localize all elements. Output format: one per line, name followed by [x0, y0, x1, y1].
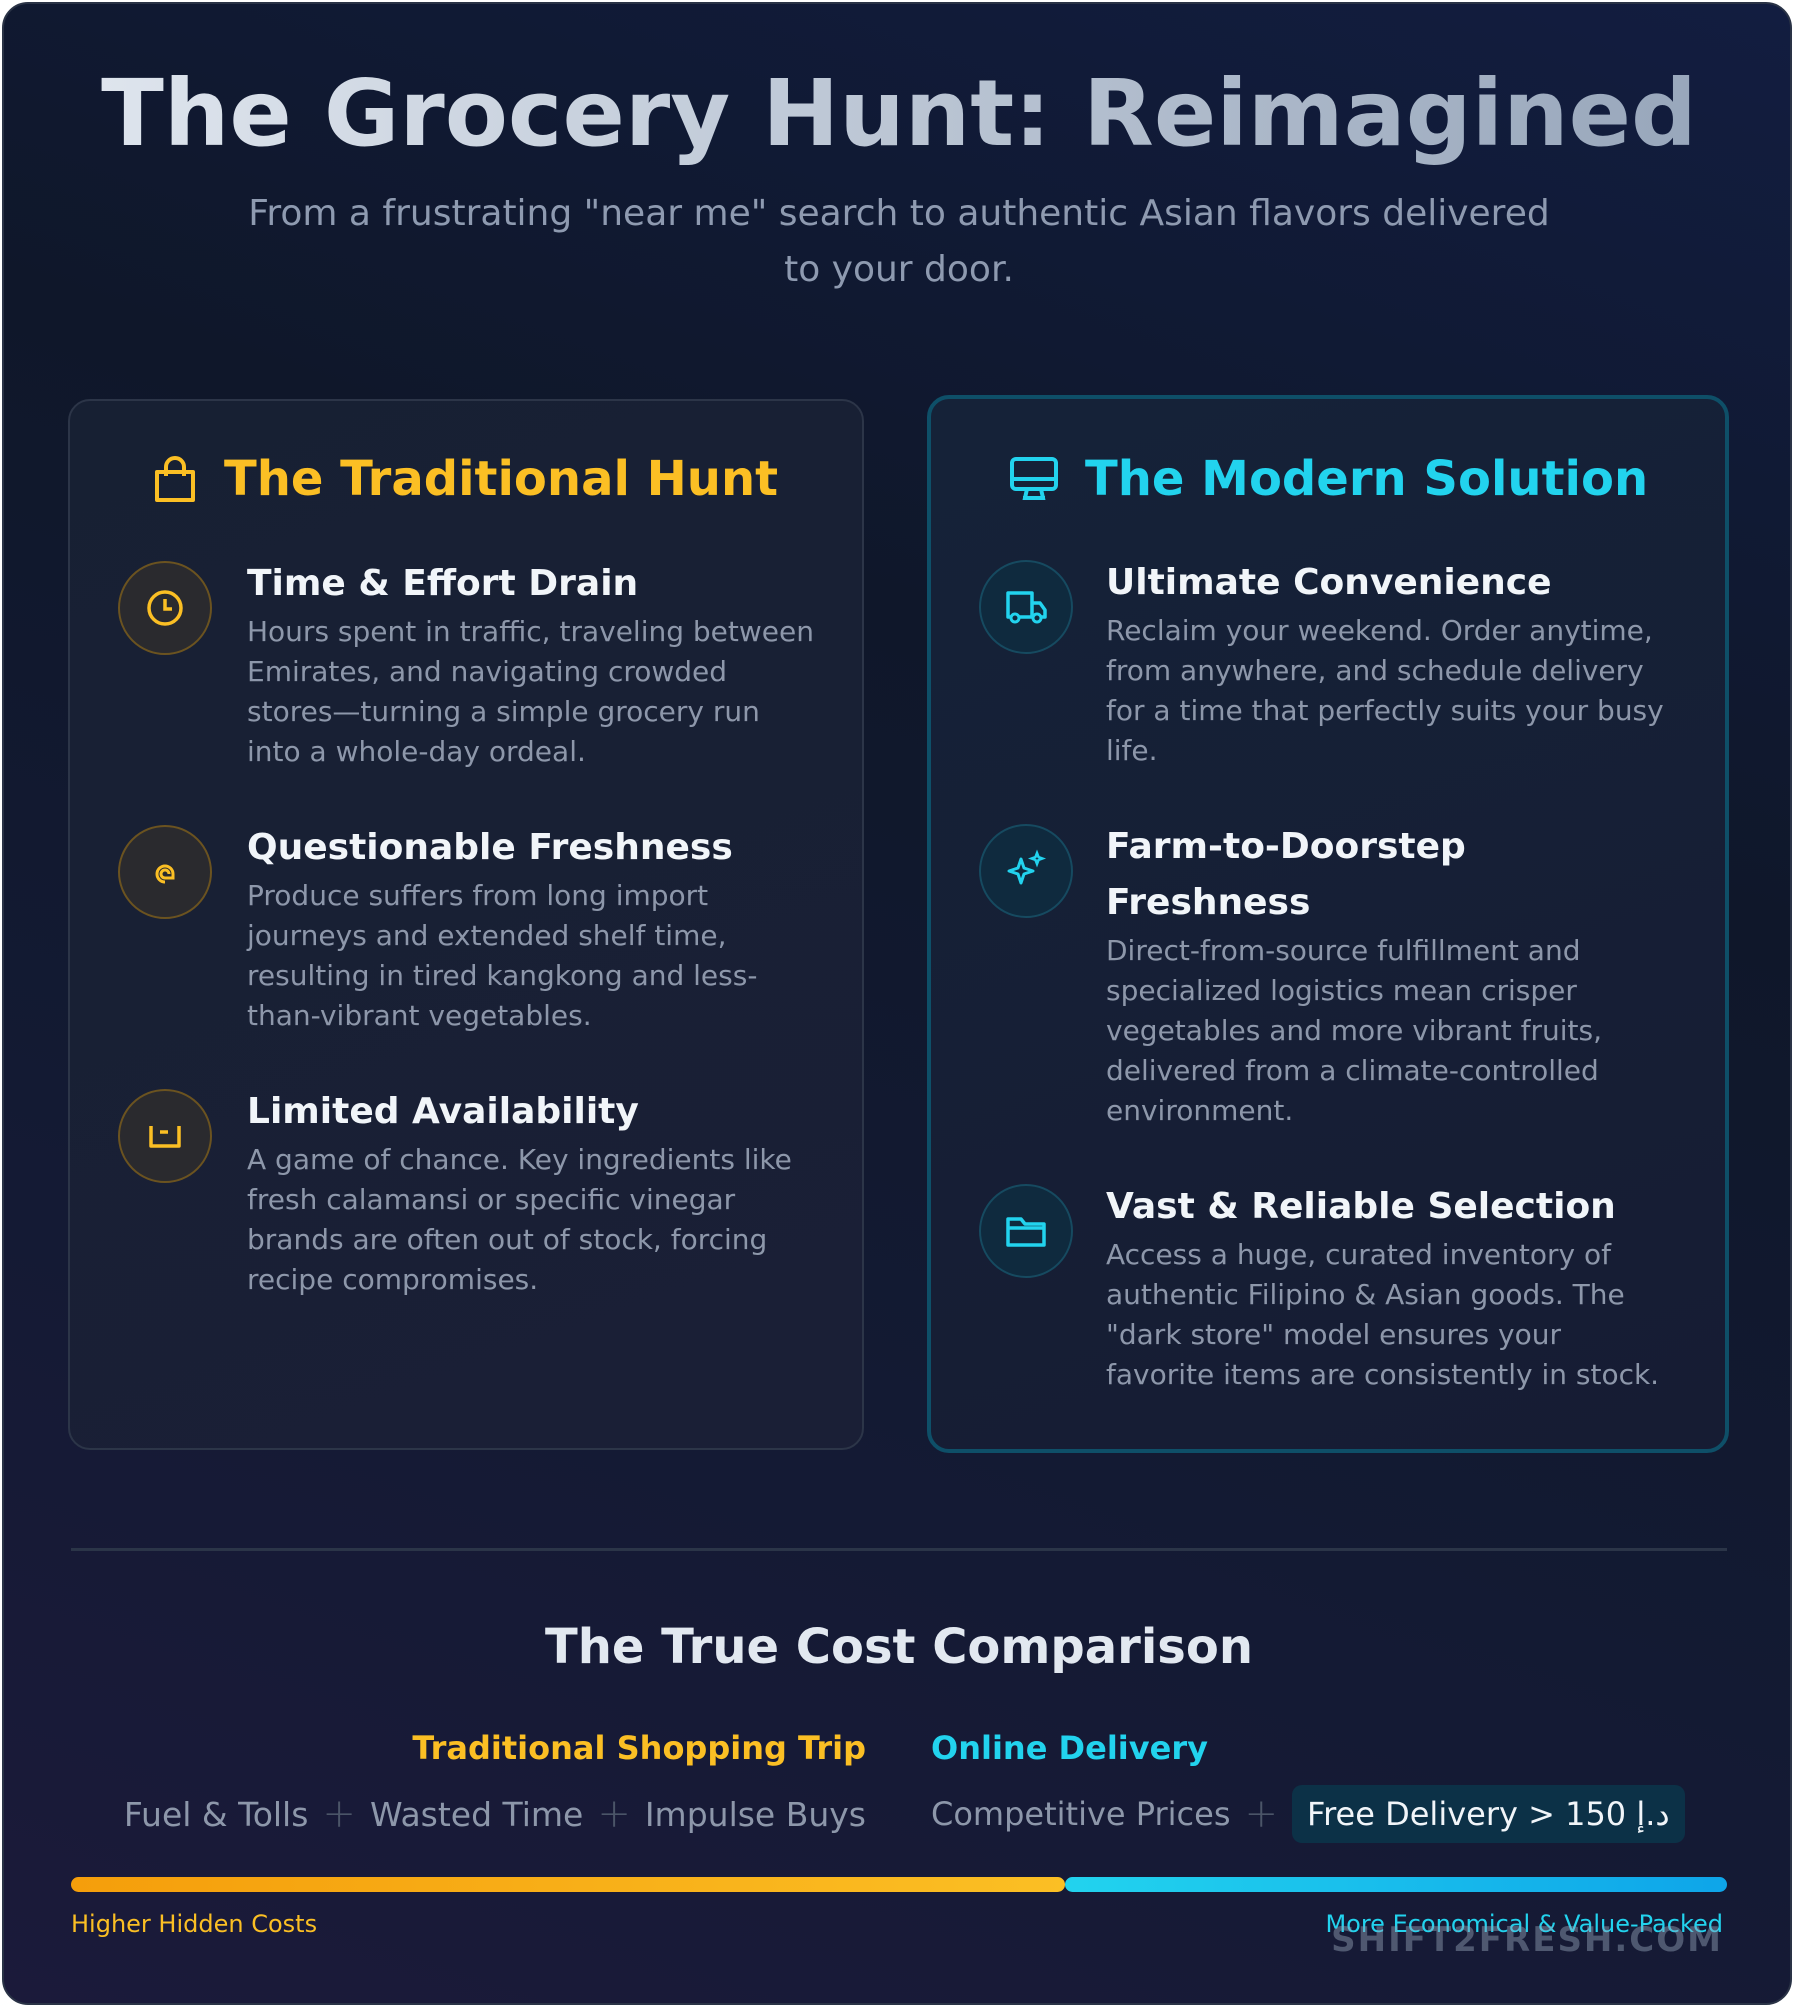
- badge: free delivery: Free Delivery > 150 د.إ: [1307, 1795, 1670, 1833]
- icon: truck: [979, 560, 1073, 654]
- item: convenience: Reclaim your weekend. Order anytime, from anywhere, and schedule delivery for a time that perfectly suits your busy life.: [1106, 614, 1664, 767]
- bar: cost gradient: [71, 1877, 1727, 1892]
- cost comparison: online: [931, 1729, 1685, 1843]
- label: higher costs: Higher Hidden Costs: [71, 1910, 317, 1938]
- panel: modern solution: [927, 395, 1729, 1453]
- cost comparison: online: Competitive Prices: [931, 1795, 1230, 1833]
- item: availability: Limited Availability: [247, 1091, 639, 1132]
- icon: swirl: [118, 825, 212, 919]
- heading: true cost comparison: The True Cost Comparison: [545, 1619, 1253, 1675]
- icon: clock: [118, 561, 212, 655]
- icon: sparkles: [979, 824, 1073, 918]
- icon: folder: [979, 1184, 1073, 1278]
- item: freshness: Questionable Freshness: [247, 827, 733, 868]
- item: farm freshness: [979, 824, 1602, 1127]
- cost comparison: traditional: [124, 1729, 866, 1837]
- cost comparison: online: Online Delivery: [931, 1729, 1208, 1767]
- item: time & effort: [118, 561, 814, 768]
- item: convenience: Ultimate Convenience: [1106, 562, 1552, 603]
- item: convenience: [979, 560, 1664, 767]
- title: The Grocery Hunt: Reimagined: [101, 60, 1697, 167]
- item: time & effort: Hours spent in traffic, traveling between Emirates, and navigating crowded stores—turning a simple grocery run into a whole-day ordeal.: [247, 615, 814, 768]
- item: farm freshness: Farm-to-Doorstep Freshness: [1106, 826, 1466, 923]
- item: availability: A game of chance. Key ingredients like fresh calamansi or specific vinegar brands are often out of stock, forcing recipe compromises.: [247, 1143, 792, 1296]
- cost comparison: traditional: +: [597, 1791, 631, 1837]
- cost comparison: traditional: Fuel & Tolls Wasted Time Impulse Buys: [124, 1794, 866, 1834]
- icon: basket: [118, 1089, 212, 1183]
- label: economical: More Economical & Value-Packed: [1325, 1910, 1723, 1938]
- item: selection: Vast & Reliable Selection: [1106, 1186, 1616, 1227]
- item: freshness: [118, 825, 757, 1032]
- heading: traditional hunt: The Traditional Hunt: [224, 451, 778, 507]
- heading: modern solution: The Modern Solution: [1085, 451, 1648, 507]
- item: availability: [118, 1089, 792, 1296]
- item: farm freshness: Direct-from-source fulfillment and specialized logistics mean crisper vegetables and more vibrant fruits, delivered from a climate-controlled environment.: [1106, 934, 1602, 1127]
- watermark: SHIFT2FRESH.COM: [1331, 1920, 1723, 1960]
- item: time & effort: Time & Effort Drain: [247, 563, 638, 604]
- badge: free delivery: [1292, 1785, 1685, 1843]
- subtitle: From a frustrating "near me" search to authentic Asian flavors delivered to your door.: [248, 193, 1550, 290]
- cost comparison: traditional: +: [322, 1791, 356, 1837]
- item: freshness: Produce suffers from long import journeys and extended shelf time, resulting in tired kangkong and less-than-vibrant vegetables.: [247, 879, 757, 1032]
- item: selection: Access a huge, curated inventory of authentic Filipino & Asian goods. The "dark store" model ensures your favorite items are consistently in stock.: [1106, 1238, 1659, 1391]
- cost comparison: online: +: [1244, 1791, 1278, 1837]
- item: selection: [979, 1184, 1659, 1391]
- cost comparison: traditional: Traditional Shopping Trip: [412, 1729, 866, 1767]
- panel: traditional hunt: [68, 399, 864, 1450]
